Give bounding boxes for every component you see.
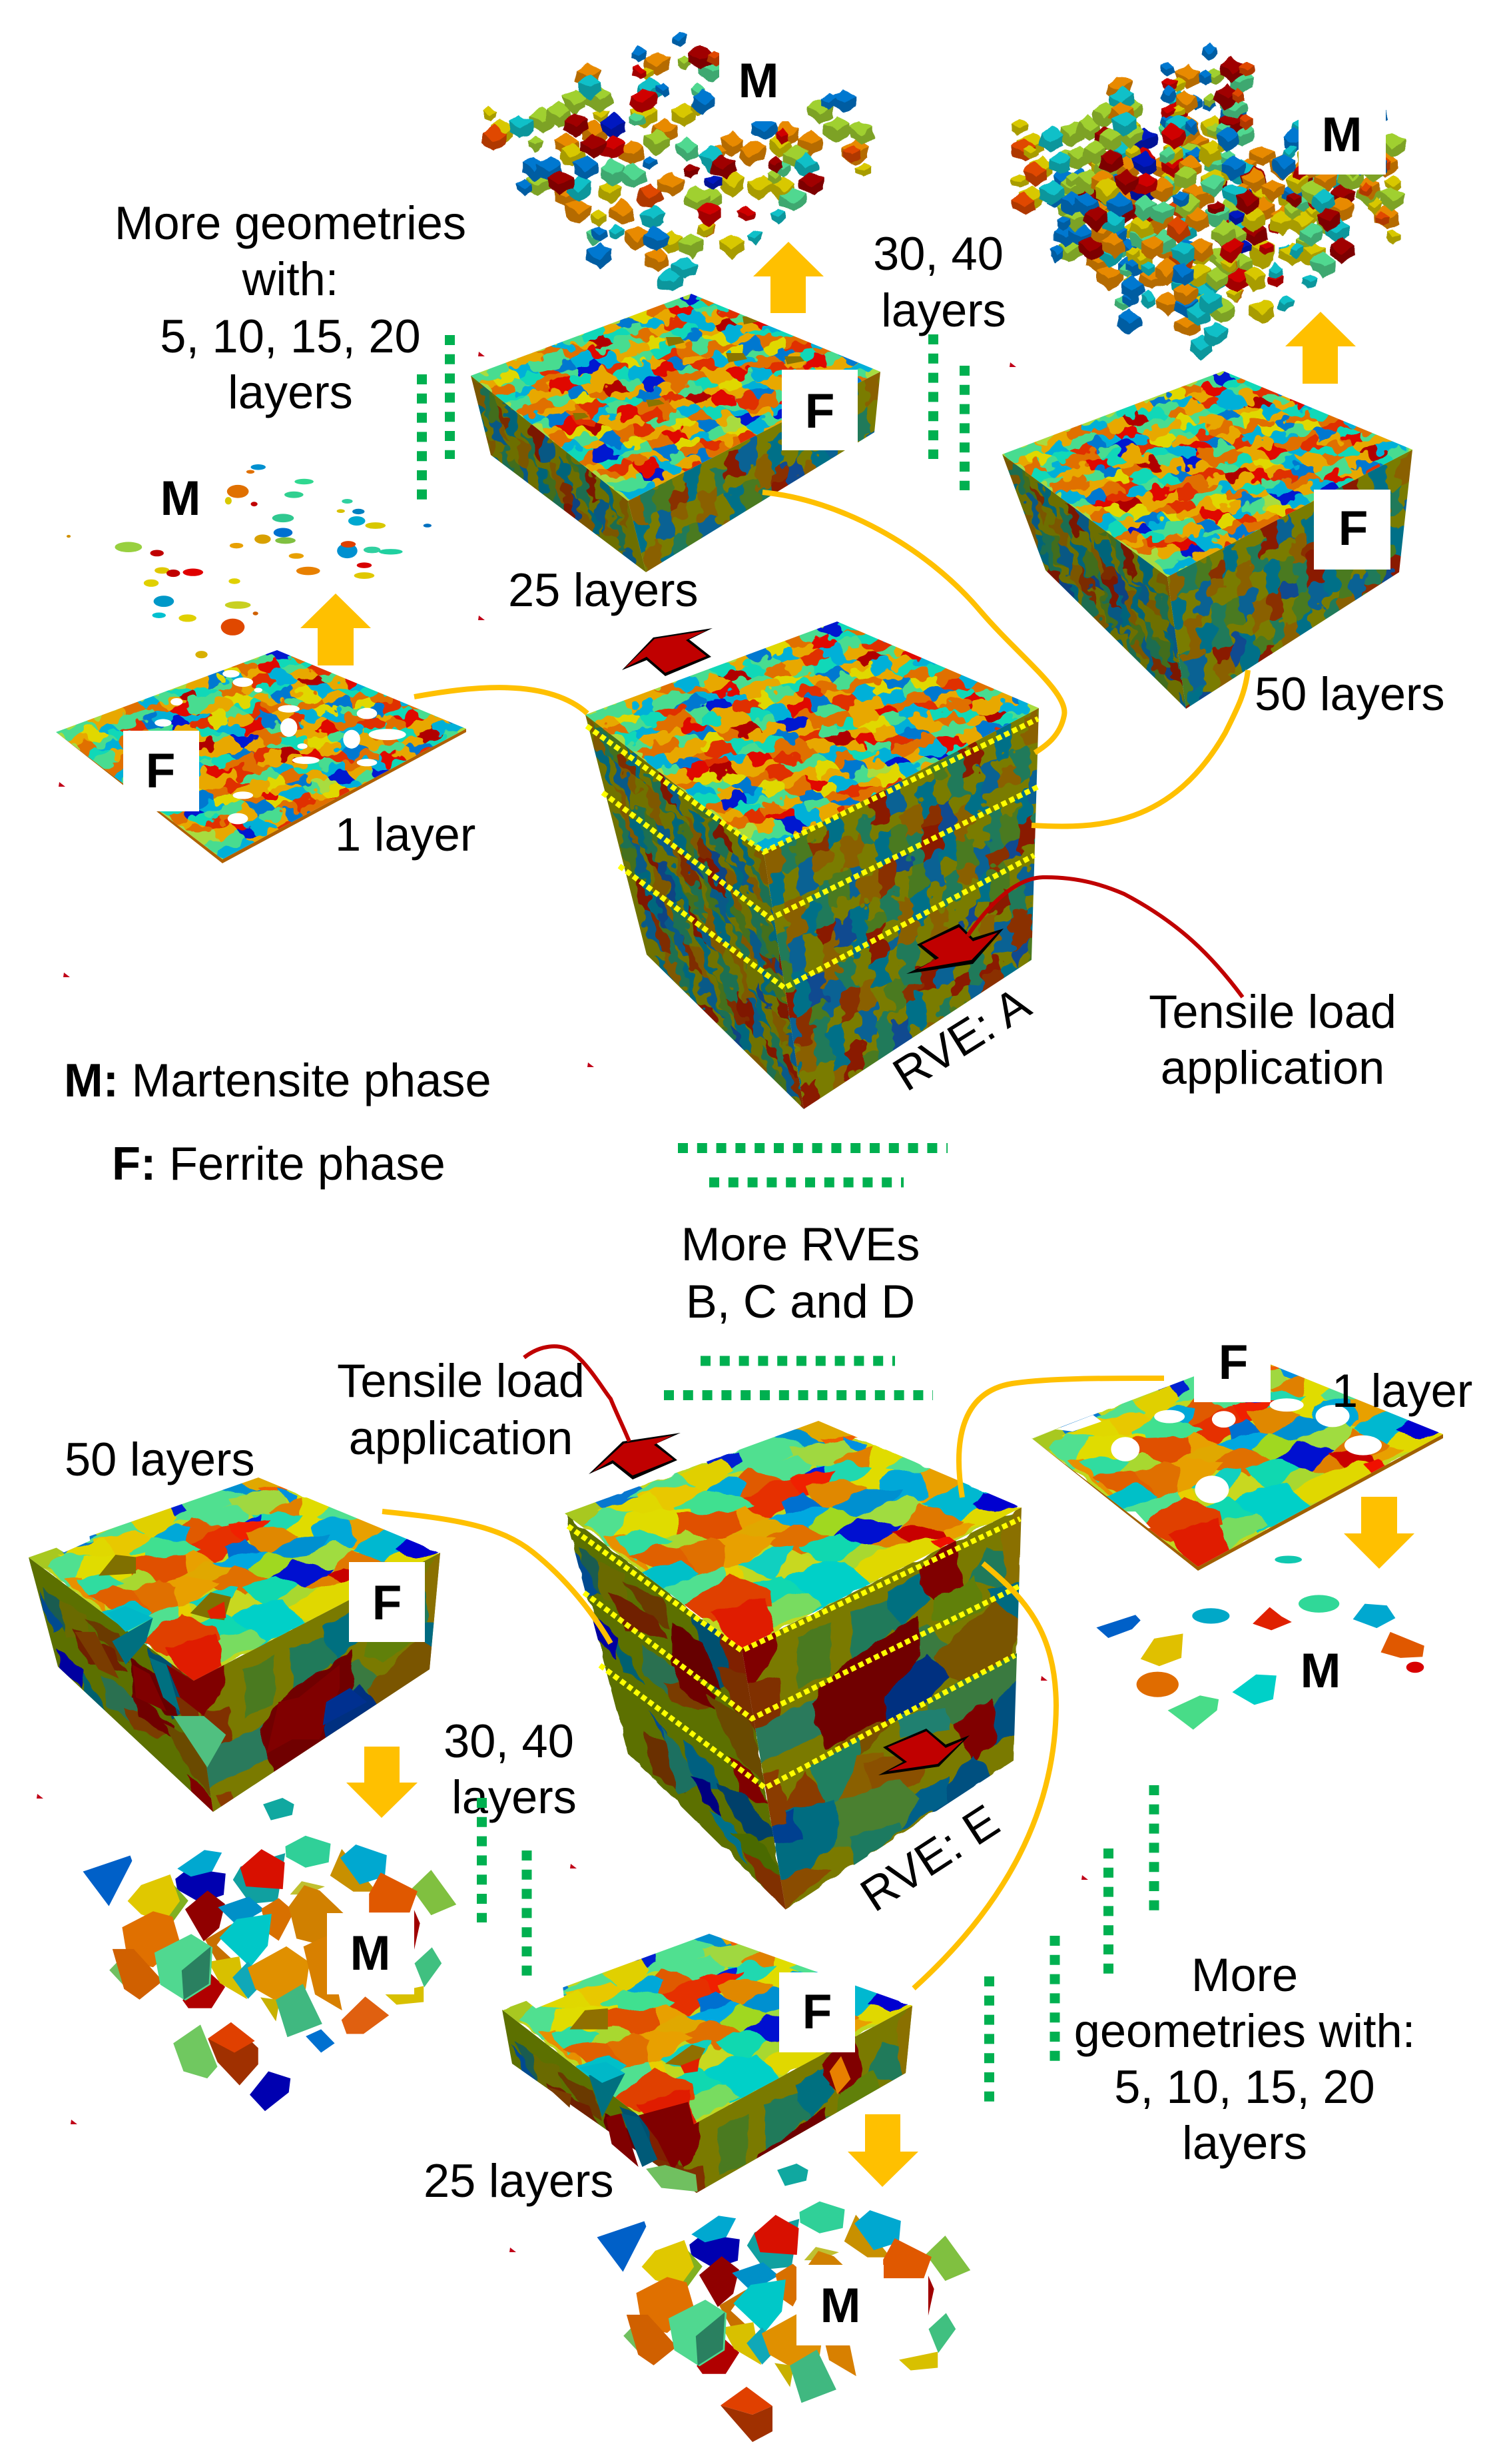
text: more geometries, top left: layers [228, 366, 353, 418]
F phase sheet with holes [1032, 1364, 1443, 1567]
label box F [349, 1562, 425, 1642]
martensite grains [83, 1798, 456, 2111]
label 1 layer: 1 layer [1332, 1364, 1472, 1417]
label: tensile load application A: Tensile load [1149, 985, 1396, 1038]
M phase flecks, 1 layer [67, 464, 432, 658]
arrow up [300, 594, 371, 665]
legend: martensite and ferrite [64, 1054, 491, 1190]
top of slab [471, 294, 880, 501]
connector: 25 layers to cube [762, 492, 1064, 753]
label box F [782, 370, 858, 450]
label box F: F [802, 1985, 832, 2039]
label box F: F [1339, 502, 1368, 556]
left side [27, 1552, 250, 1926]
label: tensile load application E [337, 1354, 585, 1464]
label 50 layers: 50 layers [1255, 667, 1445, 720]
panel: 25 layers geometry [422, 31, 964, 823]
right face [764, 708, 1039, 1109]
panel: top-left single layer geometry [56, 464, 475, 863]
sheet edge [56, 729, 466, 863]
label: tensile load application A [1149, 985, 1396, 1094]
label box M [796, 2265, 884, 2345]
top [491, 1920, 928, 2147]
text: more geometries, lower right: More [1191, 1948, 1298, 2001]
text: 30, 40 layers top [873, 227, 1006, 336]
text: 30, 40 layers top: layers [881, 284, 1006, 336]
label box F: F [1219, 1336, 1248, 1390]
connector: 1 layer to cube [414, 687, 587, 713]
panel: 25 layers geometry E [424, 1920, 970, 2442]
right side [656, 1994, 938, 2391]
top face [586, 621, 1039, 852]
left face [585, 715, 804, 1109]
connector: tensile load E [524, 1346, 629, 1441]
text: more geometries, lower right [1074, 1948, 1415, 2169]
panel: RVE A cube [585, 621, 1040, 1109]
connector: tensile load A [968, 877, 1243, 997]
text: 30, 40 layers top: 30, 40 [873, 227, 1004, 280]
label 25 layers: 25 layers [508, 564, 699, 616]
label box M [327, 1913, 414, 1994]
label: tensile load application E: Tensile load [337, 1354, 585, 1407]
label box M: M [820, 2279, 860, 2333]
legend: martensite and ferrite: F: Ferrite phase [112, 1137, 446, 1190]
text: more geometries, top left: with: [242, 252, 338, 305]
connector: 25 layers E to cube [914, 1563, 1056, 1988]
top face [559, 1419, 1030, 1657]
label 1 layer: 1 layer [335, 808, 475, 861]
dotted green lines, lower horizontal [664, 1361, 933, 1395]
text: more RVEs: B, C and D [686, 1275, 915, 1328]
label box M: M [350, 1926, 390, 1980]
right side of slab [628, 372, 880, 572]
dotted green lines, lower right [990, 1785, 1154, 2102]
left face [565, 1513, 791, 1918]
label box F: F [372, 1576, 402, 1630]
exposed grains [53, 1531, 367, 1767]
panel: RVE E cube [559, 1419, 1030, 1922]
arrow up [753, 242, 824, 313]
left side of slab [471, 376, 646, 572]
tensile arrow lower [906, 924, 1004, 974]
left side [1002, 454, 1186, 709]
panel: 50 layers geometry [952, 43, 1499, 890]
text: more geometries, lower right: geometries with: [1074, 2004, 1415, 2057]
label RVE A: RVE: A [884, 977, 1039, 1101]
text: more geometries, top left: 5, 10, 15, 20 [160, 310, 421, 362]
tensile arrow lower [878, 1729, 970, 1775]
label RVE E: RVE: E [851, 1794, 1008, 1922]
left side [499, 2005, 726, 2393]
label box F: F [805, 384, 834, 438]
top [19, 1471, 454, 1688]
dotted green lines, top centre [934, 334, 964, 490]
tensile arrow up-left [589, 1433, 681, 1479]
label 25 layers: 25 layers [424, 2154, 614, 2207]
martensite grains [597, 2164, 970, 2442]
tensile arrow up-left [622, 628, 713, 676]
label box M [719, 42, 806, 121]
F phase sheet, 1 layer [56, 650, 466, 859]
label box M: M [1322, 108, 1362, 162]
dotted green lines, top left [422, 335, 450, 500]
dotted green lines, upper horizontal [678, 1148, 948, 1182]
label box M [1299, 95, 1386, 175]
connector: 50 layers E to cube [382, 1511, 611, 1643]
layer cut lines [587, 719, 1038, 988]
sheet edge [1032, 1434, 1443, 1571]
label: tensile load application E: application [349, 1412, 573, 1464]
label box F [779, 1972, 855, 2052]
connector: 1 layer E to cube [959, 1378, 1164, 1497]
stray axis marks [37, 352, 1088, 2252]
legend: martensite and ferrite: M: Martensite phase [64, 1054, 491, 1106]
text: more geometries, lower right: 5, 10, 15, 20 [1114, 2060, 1375, 2113]
text: more geometries, lower right: layers [1182, 2116, 1307, 2169]
text: 30, 40 layers lower: 30, 40 [444, 1715, 574, 1767]
martensite cluster, 50 layers [1012, 43, 1404, 360]
panel: 1 layer geometry E [1021, 1336, 1472, 1730]
text: more RVEs [681, 1218, 920, 1328]
panel: 50 layers geometry E [19, 1433, 463, 2111]
text: more geometries, top left: More geometries [115, 197, 466, 249]
right side [1167, 450, 1412, 709]
label 50 layers: 50 layers [65, 1433, 255, 1485]
arrow down [1344, 1497, 1414, 1569]
text: 30, 40 layers lower: layers [451, 1771, 577, 1823]
right face [737, 1497, 1027, 1915]
label: tensile load application A: application [1161, 1041, 1384, 1094]
dotted green lines, lower left [482, 1798, 527, 1976]
label box M: M [739, 54, 778, 108]
label M: M [1301, 1644, 1341, 1698]
connector: 50 layers to cube [1032, 670, 1248, 827]
right side [183, 1542, 463, 1924]
text: more RVEs: More RVEs [681, 1218, 920, 1270]
arrow down [346, 1747, 418, 1818]
label box F [1314, 490, 1390, 570]
arrow up [1285, 312, 1356, 384]
martensite flecks [1096, 1555, 1424, 1730]
top [1002, 371, 1412, 577]
text: 30, 40 layers lower [444, 1715, 577, 1823]
label M: M [160, 472, 200, 526]
martensite cluster, 25 layers [481, 31, 873, 294]
label box F [123, 731, 199, 811]
text: more geometries, top left [115, 197, 466, 418]
label box F: F [146, 744, 175, 798]
exposed grains [523, 1986, 850, 2192]
layer cut lines [568, 1519, 1020, 1788]
label box F [1194, 1336, 1271, 1402]
arrow down [848, 2114, 918, 2187]
